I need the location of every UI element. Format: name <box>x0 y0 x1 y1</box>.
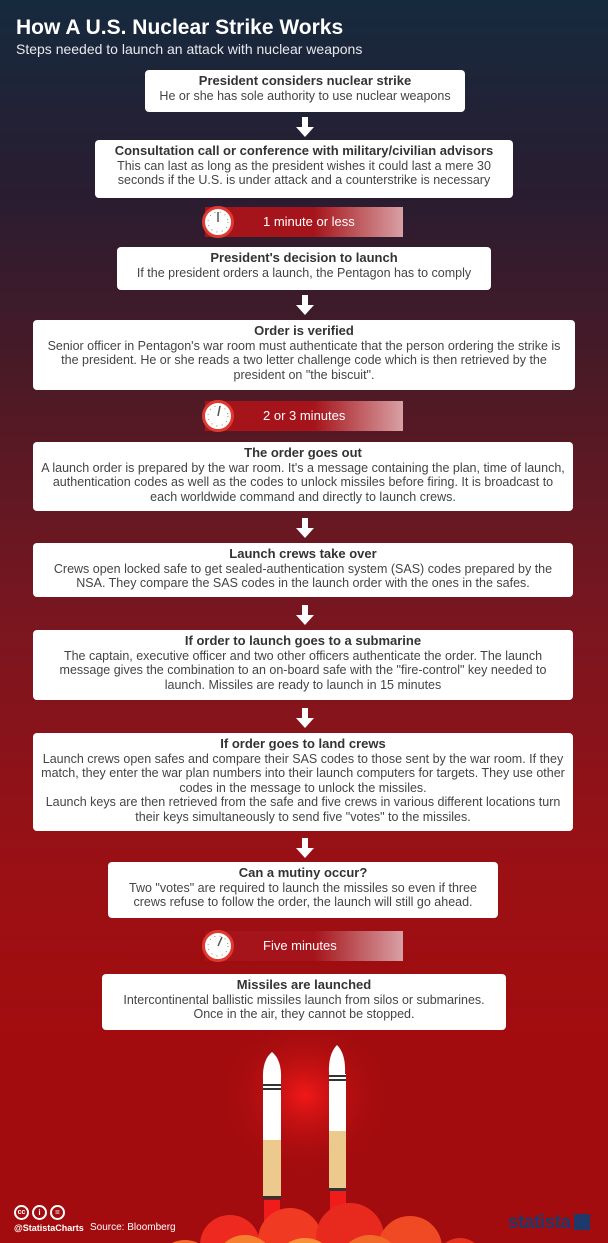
step: land crews: If order goes to land crews <box>220 736 386 751</box>
step: launched: Intercontinental ballistic missiles launch from silos or submarines. Once in the air, they cannot be stopped. <box>123 992 485 1021</box>
arrow <box>296 708 314 728</box>
footer: license icons and handle <box>14 1205 84 1233</box>
step: verified: Order is verified <box>254 323 354 338</box>
arrow <box>296 838 314 858</box>
step: decision: If the president orders a launch, the Pentagon has to comply <box>137 266 471 280</box>
step: consultation: Consultation call or conference with military/civilian advisors <box>115 143 493 158</box>
source: Source: Bloomberg <box>90 1222 176 1233</box>
timer: 1 minute <box>205 207 403 237</box>
step: decision: President's decision to launch <box>210 250 398 265</box>
timer: 1 minute: 1 minute or less <box>263 214 355 229</box>
arrow <box>296 605 314 625</box>
timer: five minutes: Five minutes <box>263 938 337 953</box>
step: order goes out: The order goes out <box>244 445 362 460</box>
logo: statista <box>508 1212 571 1233</box>
step: order goes out <box>33 442 573 511</box>
step: president considers <box>145 70 465 112</box>
step: land crews <box>33 733 573 831</box>
step: launched <box>102 974 506 1030</box>
arrow <box>296 518 314 538</box>
step: crews take over: Launch crews take over <box>229 546 377 561</box>
step: submarine: If order to launch goes to a submarine <box>185 633 421 648</box>
step: president considers: He or she has sole authority to use nuclear weapons <box>159 88 451 102</box>
step: launched: Missiles are launched <box>237 977 371 992</box>
step: consultation <box>95 140 513 198</box>
title: How A U.S. Nuclear Strike Works <box>16 16 343 39</box>
step: crews take over <box>33 543 573 597</box>
arrow <box>296 295 314 315</box>
step: mutiny <box>108 862 498 918</box>
step: order goes out: A launch order is prepared by the war room. It's a message containing the plan, time of launch, authentication codes as well as the codes to unlock missiles before firing. It is broadcast to each worldwide command and directly to launch crews. <box>41 460 565 504</box>
step: land crews: Launch crews open safes and compare their SAS codes to those sent by the war room. If they match, they enter the war plan numbers into their launch computers for targets. They use other codes in the message to unlock the missiles. <box>41 752 565 794</box>
step: mutiny: Can a mutiny occur? <box>239 865 367 880</box>
step: verified: Senior officer in Pentagon's war room must authenticate that the person ordering the strike is the president. He or she reads a two letter challenge code which is then retrieved by the president on "the biscuit". <box>48 338 560 382</box>
timer: 2 or 3 <box>205 401 403 431</box>
step: consultation: This can last as long as the president wishes it could last a mere 30 seconds if the U.S. is under attack and a counterstrike is necessary <box>117 158 491 187</box>
footer: license icons and handle: @StatistaCharts <box>14 1223 84 1233</box>
footer: license icons and handle: cc <box>18 1209 25 1216</box>
step: submarine: The captain, executive officer and two other officers authenticate the order. The launch message gives the combination to an on-board safe with the "fire-control" key needed to launch. Missiles are ready to launch in 15 minutes <box>60 648 546 692</box>
arrow <box>296 117 314 137</box>
timer: five minutes <box>205 931 403 961</box>
step: decision <box>117 247 491 290</box>
subtitle: Steps needed to launch an attack with nuclear weapons <box>16 41 362 57</box>
step: submarine <box>33 630 573 700</box>
step: mutiny: Two "votes" are required to launch the missiles so even if three crews refuse to follow the order, the launch will still go ahead. <box>129 880 477 909</box>
step: land crews: Launch keys are then retrieved from the safe and five crews in various different locations turn their keys simultaneously to send five "votes" to the missiles. <box>46 795 560 824</box>
step: verified <box>33 320 575 390</box>
timer: 2 or 3: 2 or 3 minutes <box>263 408 345 423</box>
footer: license icons and handle: i <box>38 1208 41 1217</box>
step: president considers: President considers nuclear strike <box>199 73 411 88</box>
step: crews take over: Crews open locked safe to get sealed-authentication system (SAS) codes prepared by the NSA. They compare the SAS codes in the launch order with the ones in the safes. <box>54 562 552 590</box>
illustration: rockets and clouds <box>172 1040 474 1243</box>
footer: license icons and handle: = <box>55 1208 60 1217</box>
